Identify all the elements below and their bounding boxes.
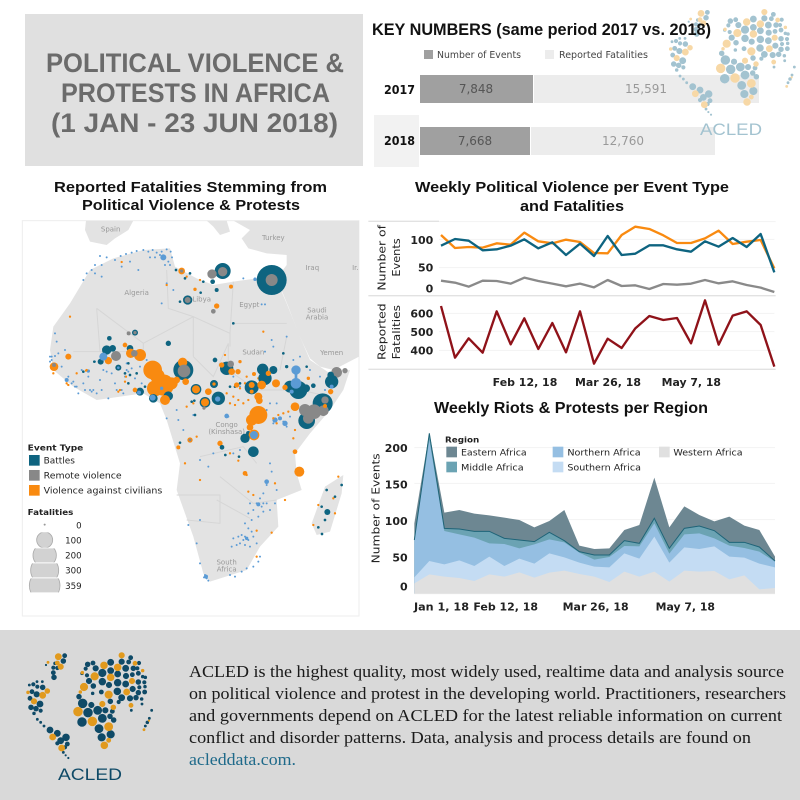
axis labels: 600 [410,308,434,321]
country labels: Egypt [239,301,260,309]
country labels: Congo [216,421,238,429]
title panel: POLITICAL VIOLENCE & [46,48,344,78]
axis labels: 500 [410,326,434,339]
description text: and governments depend on ACLED for the latest reliable information on current [189,706,782,725]
axis labels: Feb 12, 18 [493,376,557,389]
bar 2017: 7,848 [459,82,493,96]
region legend: Region [445,434,479,444]
description text: acleddata.com. [189,750,296,769]
map legend: fatalities: 200 [65,552,82,562]
title panel [25,14,363,166]
description text [189,662,786,769]
line charts: Events [391,238,403,277]
axis labels: 100 [410,234,434,247]
axis labels: May 7, 18 [656,601,715,614]
country labels: Iraq [306,264,319,272]
medium blue dots [65,254,288,579]
legend: number of events: Number of Events [437,50,521,61]
footer panel [0,630,800,800]
area chart: Number of Events [369,453,382,563]
southern africa area [414,537,775,594]
bar 2018 [384,127,715,155]
axis labels: 50 [392,552,408,565]
country borders [73,270,330,523]
key numbers heading: KEY NUMBERS (same period 2017 vs. 2018) [372,20,711,39]
eastern africa area [414,433,775,594]
line charts: Fatalities [391,305,403,359]
middle africa area [414,433,775,594]
map panel [22,221,359,616]
logo: bottom ACLED: ACLED [58,765,122,784]
axis labels: 0 [426,283,434,296]
small teal dots [83,270,342,534]
map legend: event type: Remote violence [44,472,122,482]
logo: top right ACLED [669,9,795,139]
country labels: Arabia [306,313,328,321]
line chart heading: Weekly Political Violence per Event Type [415,179,729,196]
country labels: Sudan [242,349,264,357]
country labels: Ir. [352,264,359,272]
axis labels: 200 [385,442,408,455]
area chart [369,433,775,614]
country labels: Turkey [261,234,285,242]
bar 2017: 15,591 [625,82,667,96]
country labels: Africa [217,566,237,574]
line chart heading: and Fatalities [520,198,624,215]
map title [54,179,327,214]
line chart heading [415,179,729,215]
axis labels: May 7, 18 [662,376,721,389]
country labels: Yemen [319,349,343,357]
map legend: fatalities: 0 [76,521,82,531]
legend: reported fatalities: Reported Fatalities [559,50,648,61]
title panel: (1 JAN - 23 JUN 2018) [51,108,338,138]
country labels [101,226,359,574]
country labels: South [217,559,237,567]
line charts [368,221,776,389]
axis labels [385,442,715,614]
key numbers bar chart [374,50,759,167]
axis labels: 150 [385,478,408,491]
map legend: event type: Event Type [28,443,84,453]
map legend: fatalities [28,509,82,592]
map legend: fatalities: Fatalities [28,507,73,517]
small riot dots [50,249,325,581]
region legend: Northern Africa [567,448,641,458]
country labels: Spain [101,226,120,234]
western africa area [414,571,775,594]
bar 2018: 12,760 [602,134,644,148]
region legend [445,434,743,473]
country labels: (Kinshasa) [208,428,245,436]
axis labels: Mar 26, 18 [563,601,629,614]
region legend: Southern Africa [567,463,641,473]
country labels: Saudi [307,306,327,314]
title panel: PROTESTS IN AFRICA [61,78,330,108]
country labels: Libya [192,296,211,304]
logo: bottom ACLED [27,653,153,784]
axis labels: 50 [418,262,434,275]
region legend: Eastern Africa [461,448,527,458]
axis labels: Feb 12, 18 [473,601,538,614]
description text: on political violence and protest in the developing world. Practitioners, researchers [189,684,786,703]
surrounding land [85,221,359,370]
large event bubbles [50,263,348,515]
line charts: Reported [377,303,389,360]
map legend: fatalities: 300 [65,567,82,577]
axis labels: 400 [410,345,434,358]
map legend: fatalities: 359 [65,582,82,592]
axis labels: 0 [400,580,408,593]
map legend: event type: Violence against civilians [44,487,163,497]
map legend: event type: Battles [44,457,75,467]
axis labels [410,234,721,389]
region legend: Middle Africa [461,463,524,473]
events chart [441,227,774,292]
Africa landmass [50,248,350,582]
map title: Reported Fatalities Stemming from [54,179,327,196]
bar 2018: 2018 [384,134,415,148]
axis labels: Jan 1, 18 [413,601,469,614]
bar 2017 [384,75,759,103]
axis labels: 100 [385,515,408,528]
description text: ACLED is the highest quality, most widely used, realtime data and analysis source [189,662,784,681]
fatalities chart [441,300,774,367]
map legend: event type [28,443,163,497]
map legend: fatalities: 100 [65,536,82,546]
map title: Political Violence & Protests [82,197,300,214]
country labels: Algeria [124,289,149,297]
line charts: Number of [377,225,389,291]
description text: conflict and disorder patterns. Data, analysis and process details are found on [189,728,751,747]
logo: top right ACLED: ACLED [700,120,762,139]
small orange dots [53,262,338,557]
axis labels: Mar 26, 18 [575,376,641,389]
region legend: Western Africa [673,448,743,458]
bar 2018: 7,668 [458,134,492,148]
bar 2017: 2017 [384,83,415,97]
northern africa area [414,440,775,594]
area chart heading: Weekly Riots & Protests per Region [434,400,708,417]
